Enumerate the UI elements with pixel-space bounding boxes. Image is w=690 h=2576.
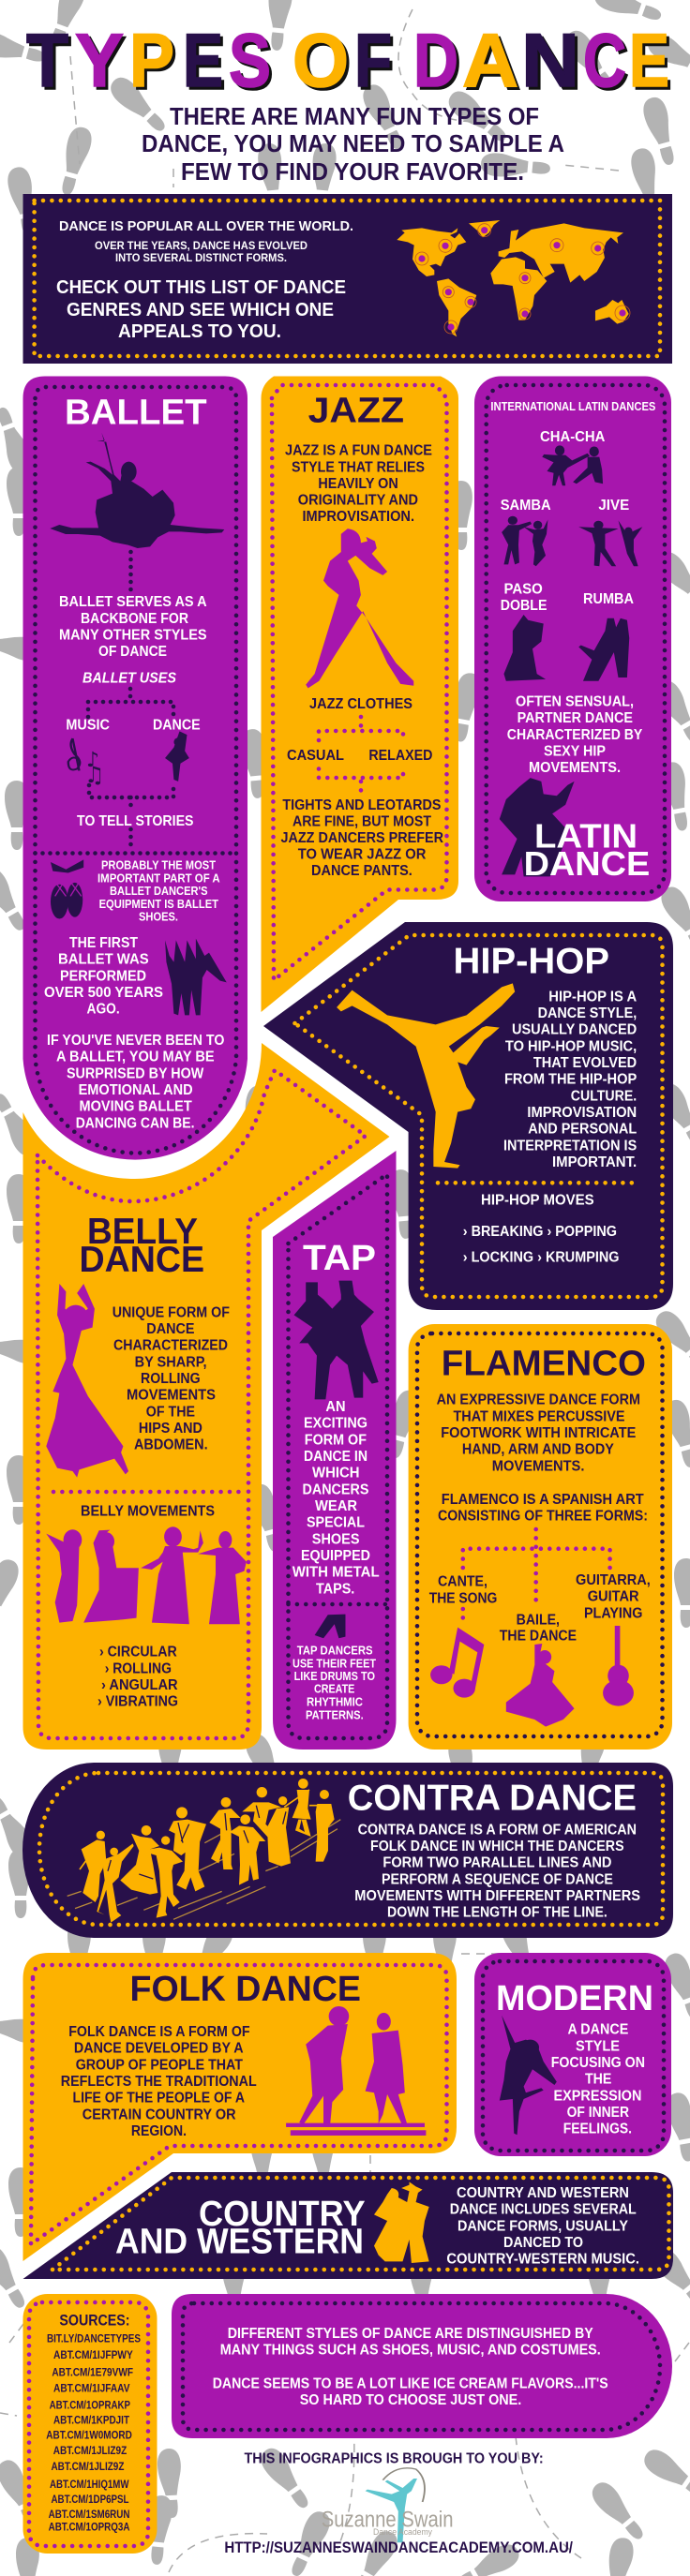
country text: DANCE INCLUDES SEVERAL	[450, 2202, 637, 2218]
panel: contra dance	[22, 1763, 673, 1938]
modern text: STYLE	[576, 2038, 620, 2054]
country text: DANCE FORMS, USUALLY	[458, 2218, 628, 2234]
illustration: contra dancers	[68, 1779, 340, 1923]
heading: COUNTRY	[199, 2195, 366, 2234]
contra text: FOLK DANCE IN WHICH THE DANCERS	[370, 1839, 624, 1854]
tap text: SPECIAL	[307, 1515, 365, 1531]
sources list: ABT.CM/1W0MORD	[46, 2429, 132, 2442]
latin labels: SEXY HIP	[544, 743, 606, 759]
jazz text: TIGHTS AND LEOTARDS	[282, 797, 442, 813]
title: D	[413, 19, 458, 103]
jazz text: STYLE THAT RELIES	[292, 459, 425, 475]
folk text: CERTAIN COUNTRY OR	[82, 2107, 236, 2122]
tap text: WEAR	[315, 1498, 357, 1514]
tap text: DANCERS	[302, 1482, 369, 1497]
belly movements list: › VIBRATING	[98, 1694, 178, 1710]
contra text: FORM TWO PARALLEL LINES AND	[382, 1855, 611, 1871]
belly description: HIPS AND	[139, 1421, 202, 1437]
closing text	[213, 2326, 608, 2408]
ballet intro text: MUSIC	[66, 717, 110, 733]
heading: LATIN	[534, 817, 638, 856]
belly description: BELLY MOVEMENTS	[81, 1503, 215, 1519]
closing ballet text: DANCING CAN BE.	[76, 1115, 195, 1131]
sources list: ABT.CM/1SM6RUN	[49, 2508, 129, 2521]
flamenco text: GUITARRA,	[576, 1572, 651, 1588]
jazz text: CASUAL	[287, 748, 344, 764]
icon: jazz dancer	[306, 529, 413, 688]
sources list: BIT.LY/DANCETYPES	[47, 2331, 141, 2345]
heading: AND WESTERN	[115, 2222, 364, 2261]
latin labels: CHA-CHA	[540, 429, 606, 445]
tap text: EXCITING	[304, 1416, 368, 1432]
heading	[115, 2195, 366, 2261]
title: C	[583, 19, 626, 103]
belly description: ABDOMEN.	[134, 1437, 208, 1453]
hip-hop text: CULTURE.	[571, 1088, 637, 1104]
icon: modern dancer	[500, 2016, 557, 2135]
tap small text: LIKE DRUMS TO	[294, 1669, 375, 1683]
tap text	[292, 1399, 380, 1597]
hip-hop text: HIP-HOP MOVES	[481, 1193, 594, 1209]
panel: folk dance	[22, 1953, 457, 2261]
logo: Suzanne Swain Dance Academy: Suzanne Swain	[322, 2508, 454, 2533]
sources list: SOURCES:	[59, 2312, 129, 2330]
hip-hop text: › LOCKING › KRUMPING	[463, 1250, 619, 1266]
closing text: DIFFERENT STYLES OF DANCE ARE DISTINGUISHED BY	[228, 2326, 593, 2342]
heading: BELLY	[87, 1212, 198, 1252]
title: E	[183, 19, 223, 103]
belly movements list	[98, 1645, 178, 1710]
subtitle: DANCE, YOU MAY NEED TO SAMPLE A	[142, 129, 564, 157]
latin labels: PASO	[504, 581, 543, 597]
flamenco text: THE DANCE	[500, 1629, 577, 1645]
title: Y	[75, 19, 124, 103]
panel: intro	[22, 194, 672, 364]
flamenco text: CANTE,	[438, 1574, 488, 1590]
intro text: GENRES AND SEE WHICH ONE	[67, 300, 334, 320]
icon: music notes: ♫	[84, 762, 105, 788]
sources list: ABT.CM/1IJFPWY	[53, 2348, 133, 2361]
credit line: THIS INFOGRAPHICS IS BROUGH TO YOU BY:	[244, 2450, 544, 2466]
latin labels: SAMBA	[501, 498, 551, 514]
title: A	[462, 19, 518, 103]
icon: belly dancer	[46, 1284, 128, 1478]
ballet intro text: BACKBONE FOR	[81, 611, 188, 627]
hip-hop text: FROM THE HIP-HOP	[504, 1072, 637, 1088]
flamenco text: PLAYING	[584, 1605, 642, 1621]
first ballet text: AGO.	[86, 1002, 120, 1018]
hip-hop text: IMPROVISATION	[527, 1105, 637, 1121]
hip-hop text: AND PERSONAL	[528, 1122, 637, 1138]
icon: row of ballet dancers	[165, 939, 227, 1015]
flamenco text: BAILE,	[517, 1612, 560, 1628]
country text: COUNTRY AND WESTERN	[457, 2185, 629, 2201]
tap small text: CREATE	[314, 1682, 355, 1696]
tap text: DANCE IN	[304, 1449, 368, 1465]
icons: latin dancers	[500, 445, 642, 876]
latin labels: JIVE	[598, 498, 630, 514]
panel: belly dance	[22, 1043, 390, 1750]
first ballet text: OVER 500 YEARS	[44, 985, 163, 1001]
contra text: MOVEMENTS WITH DIFFERENT PARTNERS	[354, 1888, 640, 1904]
latin labels: MOVEMENTS.	[529, 760, 621, 776]
heading: MODERN	[496, 1979, 653, 2018]
sources list: ABT.CM/1IJFAAV	[53, 2382, 129, 2395]
jazz text: JAZZ CLOTHES	[309, 696, 412, 712]
closing ballet text: IF YOU'VE NEVER BEEN TO	[47, 1033, 224, 1049]
closing ballet text: SURPRISED BY HOW	[67, 1065, 204, 1081]
connector	[319, 717, 403, 792]
jazz text: RELAXED	[368, 748, 432, 764]
belly description: DANCE	[146, 1321, 195, 1337]
hip-hop text	[463, 989, 638, 1266]
contra text: DOWN THE LENGTH OF THE LINE.	[387, 1905, 608, 1921]
icon: country couple	[374, 2181, 429, 2263]
latin labels	[490, 399, 656, 776]
closing text: MANY THINGS SUCH AS SHOES, MUSIC, AND COSTUMES.	[220, 2343, 601, 2359]
flamenco text: GUITAR	[588, 1589, 639, 1605]
sources list: ABT.CM/1KPDJIT	[53, 2414, 130, 2427]
folk text: REFLECTS THE TRADITIONAL	[61, 2074, 257, 2090]
hip-hop text: THAT EVOLVED	[533, 1055, 637, 1071]
title: P	[129, 19, 174, 103]
title: S	[229, 19, 271, 103]
tap small text: TAP DANCERS	[297, 1643, 373, 1657]
country text: DANCED TO	[503, 2235, 583, 2251]
panel: country and western	[22, 2172, 673, 2279]
sources list: ABT.CM/1OPRQ3A	[49, 2521, 130, 2534]
first ballet text: THE FIRST	[69, 935, 138, 951]
heading: HIP-HOP	[454, 941, 609, 981]
sources list: ABT.CM/1E79VWF	[52, 2365, 133, 2378]
latin labels: PARTNER DANCE	[518, 710, 633, 726]
tap small text: PATTERNS.	[306, 1707, 364, 1721]
belly description: MOVEMENTS	[127, 1388, 216, 1404]
connector tree	[36, 552, 236, 853]
first ballet text: BALLET WAS	[58, 952, 149, 968]
belly description: CHARACTERIZED	[113, 1338, 228, 1354]
panel: latin dance	[474, 377, 671, 901]
tap text: AN	[325, 1399, 345, 1415]
jazz text: HEAVILY ON	[318, 476, 398, 492]
folk text: GROUP OF PEOPLE THAT	[76, 2057, 243, 2073]
ballet intro text: BALLET USES	[82, 671, 176, 687]
contra text: CONTRA DANCE IS A FORM OF AMERICAN	[358, 1822, 637, 1838]
icon: music notes	[68, 738, 105, 788]
folk text: DANCE DEVELOPED BY A	[74, 2041, 244, 2057]
belly description: UNIQUE FORM OF	[112, 1304, 230, 1320]
tap text: WHICH	[312, 1466, 360, 1482]
latin labels: OFTEN SENSUAL,	[516, 694, 634, 710]
first ballet text	[44, 935, 163, 1018]
icon: small dancer	[165, 731, 189, 782]
hip-hop text: IMPORTANT.	[552, 1154, 637, 1170]
panel: sources	[22, 2294, 158, 2554]
heading: JAZZ	[308, 392, 404, 431]
sources list: ABT.CM/1JLIZ9Z	[53, 2444, 127, 2457]
latin labels: CHARACTERIZED BY	[507, 727, 643, 743]
icon: folk dancers	[286, 2006, 426, 2136]
hip-hop text: › BREAKING › POPPING	[463, 1224, 617, 1240]
icons: note, dancer, guitar	[430, 1626, 634, 1727]
flamenco text: THAT MIXES PERCUSSIVE	[454, 1408, 625, 1424]
panel: ballet	[22, 377, 248, 1160]
jazz text: IMPROVISATION.	[302, 509, 414, 525]
intro text: INTO SEVERAL DISTINCT FORMS.	[115, 251, 287, 264]
latin labels: DOBLE	[501, 598, 548, 614]
flamenco text: FLAMENCO IS A SPANISH ART	[442, 1492, 644, 1508]
subtitle: THERE ARE MANY FUN TYPES OF	[170, 102, 539, 130]
jazz text	[281, 443, 443, 879]
shoes text: PROBABLY THE MOST	[101, 858, 216, 872]
belly movements list: › CIRCULAR	[99, 1645, 177, 1660]
sources list: ABT.CM/1JLIZ9Z	[51, 2460, 124, 2473]
jazz text: TO WEAR JAZZ OR	[298, 847, 427, 863]
intro text: CHECK OUT THIS LIST OF DANCE	[56, 277, 346, 298]
subtitle: FEW TO FIND YOUR FAVORITE.	[181, 157, 524, 186]
flamenco text: THE SONG	[429, 1590, 497, 1606]
icon: tap shoes	[315, 1615, 345, 1638]
flamenco text	[429, 1392, 651, 1645]
heading	[79, 1212, 204, 1280]
hip-hop text: DANCE STYLE,	[538, 1005, 637, 1021]
heading	[524, 817, 650, 883]
modern text: EXPRESSION	[553, 2088, 641, 2104]
icon: four belly dancers	[46, 1526, 247, 1624]
modern text: A DANCE	[568, 2022, 629, 2038]
logo: Suzanne Swain Dance Academy: Dance Academy	[373, 2527, 432, 2537]
icon: music notes: ♪	[86, 749, 99, 772]
country text: COUNTRY-WESTERN MUSIC.	[446, 2252, 639, 2268]
heading: FOLK DANCE	[129, 1970, 361, 2009]
modern text: FEELINGS.	[563, 2122, 632, 2137]
flamenco text: FOOTWORK WITH INTRICATE	[441, 1425, 637, 1441]
panel: modern	[474, 1953, 671, 2156]
title	[26, 19, 669, 103]
flamenco text: HAND, ARM AND BODY	[462, 1442, 614, 1458]
ballet intro text: MANY OTHER STYLES	[59, 627, 207, 643]
title: F	[354, 19, 392, 103]
connector tree	[463, 1529, 610, 1621]
jazz text: ORIGINALITY AND	[298, 493, 418, 508]
flamenco text: MOVEMENTS.	[492, 1458, 584, 1474]
hip-hop text: INTERPRETATION IS	[503, 1138, 637, 1154]
tap small text: USE THEIR FEET	[292, 1656, 376, 1670]
heading: BALLET	[65, 393, 207, 432]
icon: tap dancers	[294, 1281, 379, 1399]
modern text: OF INNER	[567, 2105, 629, 2121]
intro text: DANCE IS POPULAR ALL OVER THE WORLD.	[59, 218, 353, 234]
tap text: EQUIPPED	[301, 1548, 370, 1564]
belly description: BY SHARP,	[135, 1354, 207, 1370]
logo: Suzanne Swain Dance Academy	[322, 2468, 454, 2542]
tap text: FORM OF	[305, 1432, 367, 1448]
closing ballet text: EMOTIONAL AND	[79, 1082, 193, 1098]
contra text: PERFORM A SEQUENCE OF DANCE	[382, 1871, 613, 1887]
sources list: ABT.CM/1HIQ1MW	[50, 2478, 129, 2491]
first ballet text: PERFORMED	[60, 968, 146, 984]
jazz text: ARE FINE, BUT MOST	[292, 813, 431, 829]
closing text: DANCE SEEMS TO BE A LOT LIKE ICE CREAM FLAVORS...IT'S	[213, 2375, 608, 2391]
modern text: FOCUSING ON	[551, 2055, 645, 2071]
shoes text: BALLET DANCER'S	[110, 884, 208, 898]
folk text: REGION.	[131, 2123, 187, 2139]
modern text	[551, 2022, 645, 2137]
jazz text: DANCE PANTS.	[311, 863, 412, 879]
title: O	[292, 19, 349, 103]
title: E	[629, 19, 669, 103]
sources list	[46, 2312, 141, 2534]
heading: CONTRA DANCE	[348, 1779, 637, 1819]
hip-hop text: TO HIP-HOP MUSIC,	[505, 1038, 637, 1054]
ballet intro text: OF DANCE	[98, 644, 167, 660]
belly description: ROLLING	[141, 1371, 201, 1387]
panel: hip-hop	[263, 922, 673, 1310]
icon: breakdancer	[337, 983, 515, 1169]
latin labels: INTERNATIONAL LATIN DANCES	[490, 399, 656, 413]
ballet intro text	[59, 594, 207, 829]
modern text: THE	[585, 2072, 612, 2088]
website url: HTTP://SUZANNESWAINDANCEACADEMY.COM.AU/	[224, 2539, 573, 2556]
heading: FLAMENCO	[442, 1345, 646, 1384]
contra text	[354, 1822, 640, 1921]
sources list: ABT.CM/1OPRAKP	[50, 2398, 130, 2411]
icon: ballet shoes	[51, 859, 83, 919]
shoes text: IMPORTANT PART OF A	[98, 871, 220, 885]
intro text: APPEALS TO YOU.	[118, 321, 281, 342]
closing text: SO HARD TO CHOOSE JUST ONE.	[300, 2392, 521, 2408]
jazz text: JAZZ DANCERS PREFER	[281, 830, 443, 846]
panel: closing message	[172, 2294, 672, 2438]
heading: TAP	[303, 1239, 376, 1278]
world map	[397, 220, 630, 336]
folk text: FOLK DANCE IS A FORM OF	[68, 2024, 250, 2040]
belly movements list: › ROLLING	[105, 1660, 172, 1676]
tap small text: RHYTHMIC	[307, 1695, 364, 1709]
tap text: SHOES	[312, 1531, 360, 1547]
intro text	[56, 218, 353, 342]
tap text: TAPS.	[316, 1581, 354, 1597]
flamenco text: CONSISTING OF THREE FORMS:	[438, 1509, 648, 1525]
shoes text: SHOES.	[139, 909, 178, 923]
ballet intro text: BALLET SERVES AS A	[59, 594, 207, 610]
shoes text: EQUIPMENT IS BALLET	[99, 897, 218, 911]
ballet intro text: TO TELL STORIES	[77, 813, 194, 829]
subtitle	[142, 102, 564, 186]
shoes text	[98, 858, 220, 923]
closing ballet text: MOVING BALLET	[79, 1099, 192, 1115]
hip-hop text: USUALLY DANCED	[512, 1022, 637, 1038]
closing ballet text	[47, 1033, 224, 1131]
belly description	[81, 1304, 230, 1519]
folk text	[61, 2024, 257, 2139]
belly movements list: › ANGULAR	[101, 1677, 178, 1693]
folk text: LIFE OF THE PEOPLE OF A	[73, 2091, 245, 2107]
belly description: OF THE	[146, 1404, 195, 1420]
ballet intro text: DANCE	[153, 717, 201, 733]
panel: flamenco	[409, 1324, 672, 1750]
icon: ballerina	[50, 433, 224, 548]
tap text: WITH METAL	[292, 1565, 380, 1581]
heading: DANCE	[79, 1240, 204, 1280]
hip-hop text: HIP-HOP IS A	[548, 989, 638, 1005]
intro text: OVER THE YEARS, DANCE HAS EVOLVED	[95, 239, 308, 252]
title: T	[26, 19, 68, 103]
closing ballet text: A BALLET, YOU MAY BE	[56, 1050, 215, 1065]
jazz text: JAZZ IS A FUN DANCE	[285, 443, 432, 459]
panel: jazz	[261, 377, 458, 1012]
heading: DANCE	[524, 844, 650, 883]
country text	[446, 2185, 639, 2268]
tap small text	[292, 1643, 376, 1721]
panel: tap	[273, 1151, 396, 1750]
sources list: ABT.CM/1DP6PSL	[51, 2493, 129, 2506]
latin labels: RUMBA	[583, 591, 634, 607]
flamenco text: AN EXPRESSIVE DANCE FORM	[437, 1392, 640, 1408]
title: N	[521, 19, 579, 103]
